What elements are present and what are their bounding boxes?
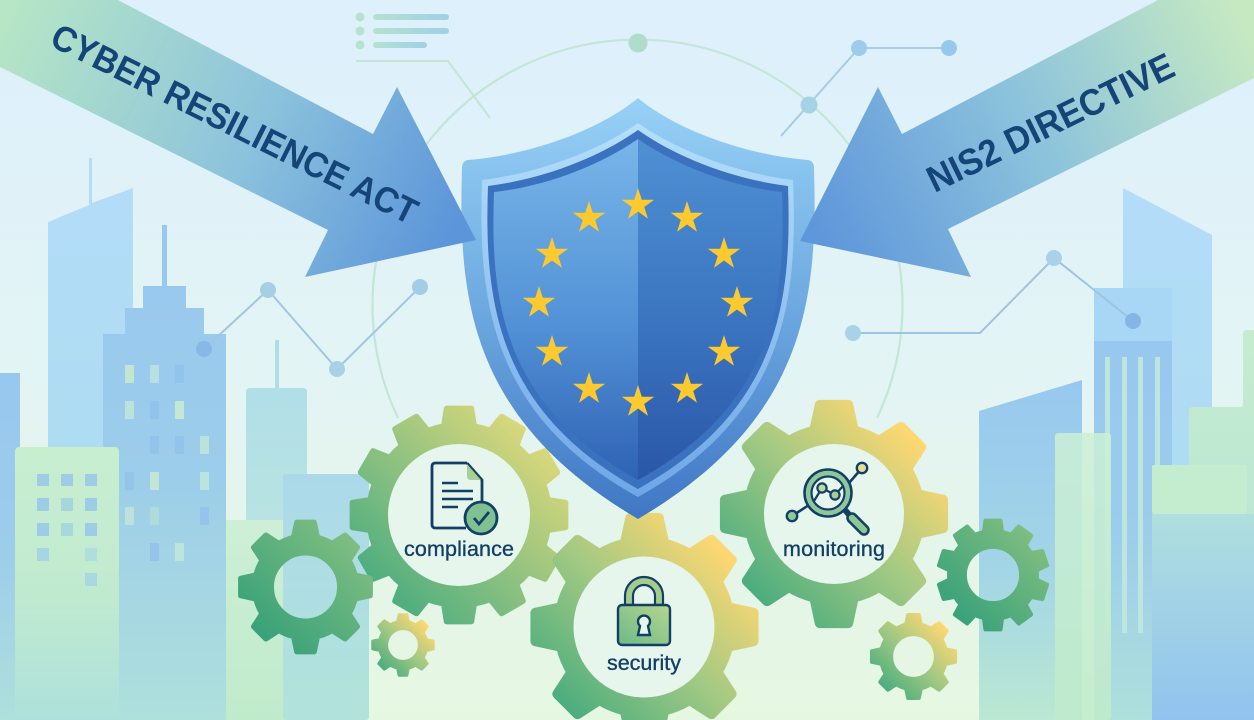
- line chart right: [845, 250, 1141, 341]
- building: green stepped block: [1189, 330, 1254, 720]
- label: nis2 directive: NIS2 DIRECTIVE: [920, 45, 1181, 200]
- right skyline: [979, 188, 1254, 720]
- gear: compliance: [353, 409, 565, 621]
- gear: monitoring: [725, 405, 943, 623]
- list motif top left: [356, 12, 490, 118]
- building: pale tower: [246, 340, 307, 720]
- label: compliance: compliance: [404, 537, 514, 561]
- label: monitoring: monitoring: [783, 537, 885, 561]
- building: tall light slanted tower: [1123, 188, 1212, 720]
- arrow: cyber resilience act: [0, 0, 476, 277]
- gear: small right: [872, 615, 955, 698]
- icon: document with check: [432, 463, 497, 534]
- EU stars: [523, 188, 753, 416]
- shield: [461, 98, 815, 519]
- shield: light band: [481, 123, 794, 497]
- building: pale green slab: [1055, 433, 1111, 720]
- icon: padlock: [618, 577, 670, 645]
- icon: magnifier with chart: [787, 463, 867, 530]
- line chart left: [196, 279, 428, 377]
- building: pale green block: [226, 520, 290, 720]
- network circle arc: [372, 40, 902, 418]
- green block windows: [37, 474, 97, 586]
- building: far left strip: [0, 373, 20, 720]
- tower windows: [125, 365, 209, 561]
- gear: small left: [373, 615, 433, 675]
- building: tall light tower: [48, 158, 133, 720]
- shield: outer rim: [461, 98, 815, 519]
- building: lower right block: [1152, 514, 1254, 720]
- building: columned tower: [1094, 288, 1172, 720]
- building: slanted blue block: [979, 380, 1082, 720]
- label: security: security: [607, 651, 681, 675]
- left skyline: [0, 158, 369, 720]
- shield: right field: [638, 139, 783, 480]
- columns: [1105, 357, 1160, 633]
- top node on arc: [628, 34, 648, 52]
- gear: security: [535, 518, 754, 720]
- network motif top right: [781, 40, 957, 136]
- label: cyber resilience act: CYBER RESILIENCE ACT: [45, 15, 425, 232]
- gear: large dark left: [241, 523, 370, 651]
- building: light blue front block: [283, 474, 369, 720]
- gear: dark right: [939, 521, 1047, 629]
- shield: left field: [493, 139, 638, 480]
- building: light green block: [15, 447, 119, 720]
- building: stepped blue tower: [103, 225, 226, 720]
- arrow: nis2 directive: [800, 0, 1254, 277]
- shield: dark band: [487, 130, 789, 489]
- building: green band: [1152, 465, 1247, 514]
